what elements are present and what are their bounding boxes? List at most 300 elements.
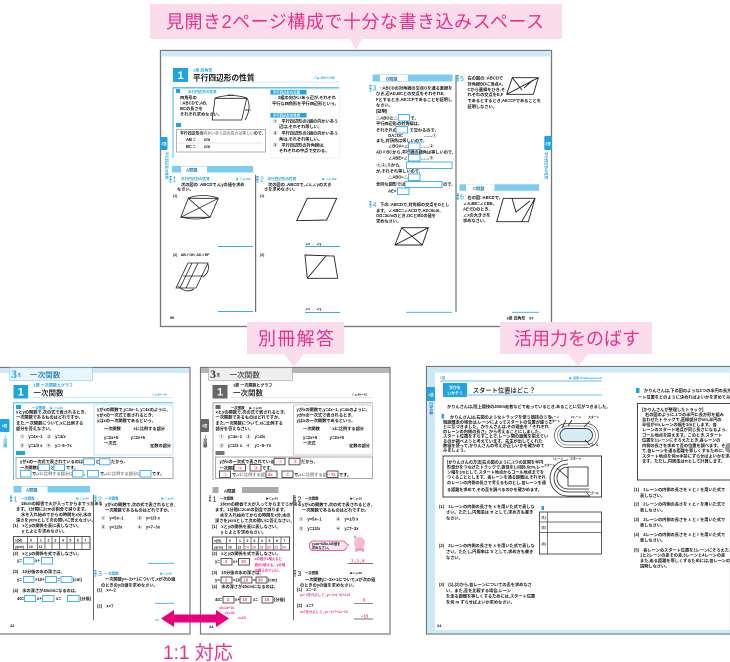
- figure: parallelogram grid: [176, 263, 208, 291]
- section band: A: [212, 487, 278, 494]
- problem 1 text: みましょう。: [443, 446, 468, 454]
- table: 12: [38, 545, 42, 549]
- exercise 1: (分後): [80, 595, 92, 602]
- inner note: yはxの一次関数であるという。: [296, 417, 355, 424]
- panel: key points: また,一次関数について,xに比例する: [216, 420, 283, 426]
- exercise 3: が,それぞれ等しいので,: [376, 168, 420, 174]
- exercise 3: 平行四辺形の対角線は,: [376, 120, 419, 127]
- exercise 4: [370, 201, 452, 312]
- panel: definitions: 角は,それぞれ等しい。: [279, 136, 322, 142]
- problem 1 text: スタート位置をずらすことで,レーン間の距離を揃えてい: [443, 432, 548, 440]
- note box: ゴール地点を揃えます。このとき,スタート: [642, 432, 722, 438]
- answer box: ①: [278, 458, 283, 465]
- panel: key points: xとyの関数で,次の式で表されるとき,: [16, 408, 86, 416]
- exercise 3 answers: 3: [298, 571, 302, 578]
- exercise 3: △ABOと△ で,: [376, 114, 416, 120]
- chapter tab: 一次関数: [30, 370, 61, 380]
- exercise 2: さを求めなさい。: [264, 186, 298, 192]
- exercise 1 answers: (2) xとyの関係を式で表しなさい。: [212, 550, 280, 557]
- exercise 2: [96, 496, 175, 563]
- activity title: [443, 383, 602, 397]
- exercise 2: ∠x ∠y: [305, 307, 322, 311]
- exercise 1: ｙとよとを求めなさい。: [21, 528, 67, 534]
- note box: 内側の長さを求めて差の位置を調べます。そし: [642, 442, 730, 449]
- exercise 4: OD=3cmのとき,OCとBDの値を: [376, 212, 436, 219]
- problem 1 text: 短距離走の場合は,レーンによってスタートの位置が違うこ: [443, 418, 552, 426]
- inner note: 一次関数 xに比例する部分: [104, 425, 166, 432]
- answer box: −7x: [328, 472, 336, 477]
- exercise 6: ∠xの大きさを: [463, 212, 490, 218]
- exercise 3: (2) x=7: [97, 604, 114, 608]
- table: 14: [245, 546, 249, 550]
- answer table: (3): [542, 542, 546, 546]
- section band: C: C問題: [473, 186, 485, 192]
- exercise 1 answers: 10: [244, 578, 249, 582]
- side tab: [0, 419, 10, 449]
- exercise 1 answers: ×10+: [233, 578, 243, 582]
- exercise 1 answers: 30: [258, 578, 263, 582]
- section band: C: [460, 184, 539, 192]
- problem 2: 説明しなさい。: [640, 562, 669, 570]
- problem 2: 表しなさい。: [640, 522, 665, 528]
- inner note: 一次式: [104, 440, 117, 446]
- pink working notes: 40=2x+10: [219, 606, 234, 610]
- exercise 3: それぞれの で交わるので,: [376, 126, 436, 134]
- panel: definitions: 辺は,それぞれ等しい。: [279, 123, 322, 130]
- exercise 3: (証明): [376, 108, 388, 114]
- panel: key points: ③ y=1/3 x ④ y=−5−7x: [220, 442, 272, 449]
- figure: parallelogram with diagonals: [395, 228, 428, 245]
- exercise 2 answers: 2: [298, 496, 302, 504]
- exercise 2: ② y=1/3 x: [138, 514, 161, 522]
- activity title: 学びを: [449, 385, 461, 390]
- exercise 3: 3: [372, 86, 376, 92]
- exercise 1 answers: 2: [227, 597, 230, 602]
- section band: A: A問題: [26, 488, 38, 494]
- exercise 4: ます。∠ABC=∠ACDで,AD=6cm,: [376, 207, 440, 214]
- activity title: いかそう: [447, 390, 463, 396]
- side tab left: [160, 137, 170, 180]
- table: 2: [48, 538, 50, 542]
- side tab right: 3章: [545, 141, 551, 146]
- page number 24: 24: [437, 623, 442, 628]
- problem 2: (1) 1レーンの内側の長さを x と r を用いた式で: [634, 486, 725, 493]
- questions left: さい。ただし,円周率は π として,求め方も書き: [446, 548, 533, 555]
- panel: key points: ▶ ⊂p.60: [249, 406, 262, 410]
- question box: だから,: [111, 458, 125, 465]
- centre divider left: [255, 175, 257, 312]
- figure: track diagram: スタート: [588, 414, 600, 419]
- section band: A: A問題: [224, 488, 236, 494]
- question box: と: [50, 465, 55, 470]
- exercise 3: △ABO≡△: [388, 174, 409, 180]
- panel: key points: ① y=4x−1 ② y=4/x: [220, 433, 266, 440]
- problem 1 text: 数値を使って,かりんさんの考えが正しいかを確かめて: [443, 442, 544, 449]
- inner note: y=2x+5 y=2x+5: [104, 435, 146, 440]
- panel: key points: 部分を答えなさい。: [216, 425, 253, 432]
- figure: parallelogram 2: [305, 255, 338, 278]
- table: 16: [252, 546, 256, 550]
- panel: definitions: 平行な四角形を平行四辺形という。: [272, 100, 339, 107]
- lesson number badge: [173, 68, 188, 82]
- problem 2: (3) 3レーンの内側の長さを x と r を用いた式で: [634, 516, 725, 523]
- exercise 5: であるとするとき,AE=CFであることを: [468, 97, 541, 104]
- chapter tab: 一次関数: [230, 370, 260, 380]
- exercise 3: ……③: [421, 154, 434, 162]
- exercise 3 answers: (2) x=7: [297, 603, 314, 608]
- page header: [440, 375, 602, 381]
- exercise 1: (2) AB∥GH, AD∥EF: [173, 253, 210, 257]
- figure: lane arcs: ゴール: [590, 490, 599, 495]
- problem 2: 1と2レーンの差その差,3レーンと4レーンの差: [640, 552, 725, 558]
- arrow: one-to-one correspondence: [161, 610, 229, 627]
- panel: key points: 部分を答えなさい。: [16, 425, 54, 432]
- inner note: 定数の部分: [150, 442, 172, 449]
- section band: A: [172, 166, 253, 174]
- icon: pink character: [354, 536, 365, 552]
- exercise 3 answers: 一次関数: [305, 570, 319, 575]
- exercise 2 answers: ③ y=12/x: [299, 525, 321, 532]
- note box with figure: のレーンの内側の長さで考えるものとし,各レーンを通: [447, 479, 547, 485]
- exercise 3: (1) x=−2: [97, 588, 117, 592]
- exercise 3: 一次関数: [105, 570, 119, 576]
- exercise 3: 3: [98, 571, 102, 578]
- exercise 1: 次の図の□ABCDで,x,yの値を求め: [181, 181, 244, 188]
- exercise 3 answers: ▶⊂p.60: [350, 571, 362, 575]
- note box with figure: [443, 456, 602, 497]
- exercise 6: ∠A,BE=∠CBE,: [463, 201, 494, 206]
- exercise 3: ので,: [443, 182, 453, 188]
- exercise 1 answers: ます。1分間に2cmの割合で減ります。: [215, 506, 288, 513]
- panel: key points: それぞれ求めなさい。: [180, 110, 222, 118]
- exercise 1: 18cmの線香で火が入ってからまでうがある: [21, 500, 103, 507]
- table: 6: [276, 539, 278, 543]
- answer box: ③: [254, 464, 259, 472]
- page header: ▶ 活用 challenge point: [569, 375, 602, 380]
- exercise 1: (1): [173, 194, 177, 198]
- exercise 1 answers: 10: [241, 559, 246, 564]
- answer box: です。: [262, 464, 274, 472]
- exercise 2: 平行四辺形の性質: [268, 176, 297, 181]
- side tab: 一次関数: [203, 435, 208, 449]
- side tab: 3章: [202, 423, 208, 428]
- exercise 1: (4) 水の深さが40cmになるのは,: [13, 587, 76, 594]
- exercise 5: Cから垂線をひき,そ: [468, 86, 505, 93]
- figure: parallelogram with diagonals: [181, 196, 218, 219]
- question box: で,xに比例する部分は: [100, 470, 142, 477]
- inner note: yはxの一次関数であるという。: [97, 417, 156, 424]
- side tab left: 3章: [161, 141, 167, 146]
- table: 3: [54, 538, 56, 542]
- exercise 1: 一次関数: [21, 496, 35, 500]
- answer box: yがxの一次式で表されているのは,: [220, 458, 284, 465]
- figure: lane arcs: 1レーン: [553, 456, 563, 460]
- exercise 1: 深さをycmとして次の問いに答えなさい。: [16, 516, 95, 524]
- panel: key points: ③ y=1/3 x ④ y=−5−7x: [20, 442, 72, 449]
- pink working notes: [219, 556, 286, 620]
- exercise 3: ひき,辺AD,BCとの交点をそれぞれE,: [376, 90, 445, 97]
- lesson number badge: [212, 385, 228, 398]
- table: 5: [268, 539, 270, 543]
- exercise 5: 証明しなさい。: [468, 103, 497, 110]
- panel: definitions: 平行四辺形の性質: [273, 112, 301, 118]
- panel: key points: BCの長さを: [180, 105, 203, 112]
- exercise 1 answers: y=: [215, 578, 220, 582]
- page header: 1章: [440, 375, 446, 380]
- figure: parallelogram with bisector: [497, 198, 535, 222]
- exercise 1 answers: 40=: [215, 597, 223, 602]
- problem 2: 表しなさい。: [640, 506, 665, 514]
- panel: definitions: ① 平行四辺形の2組の向かいあう: [273, 118, 338, 124]
- table: 0: [229, 539, 231, 543]
- table: 6: [77, 538, 79, 542]
- exercise 3: なさい。: [376, 102, 393, 108]
- exercise 2 answers: 一次関数であるものはどれですか。: [302, 506, 369, 514]
- exercise 2 answers: ④ y=7−3x: [336, 525, 359, 532]
- questions left: を何 m ずらせばよいか求めなさい。: [446, 598, 515, 606]
- table: 5: [70, 538, 72, 542]
- exercise 5: 右の図の□ABCDで: [468, 74, 503, 82]
- exercise 3 answers: (1) x=−2: [297, 587, 317, 592]
- problem 1 text: のレーンの内側の長さ」から考えることにしました。: [443, 428, 543, 435]
- question box: 平行四辺形の向かいあう辺の長さは等しいので,: [180, 130, 263, 136]
- exercise 1: x+: [35, 558, 40, 563]
- exercise 1: 水を入れ始めてからの時間をx分,水の: [21, 511, 92, 518]
- lesson heading: ⊂p.60〜61: [152, 392, 168, 396]
- answer box: ①: [223, 471, 228, 478]
- answer box: ①: [238, 464, 243, 472]
- answer table: [540, 506, 602, 554]
- exercise 1: ▶ ⊂p.102: [236, 177, 251, 181]
- exercise 1 answers: x=: [253, 597, 258, 602]
- exercise 3: ∠ABE=∠: [388, 156, 408, 160]
- exercise 1: ▶ ⊂p.60: [76, 496, 89, 500]
- exercise 3: ▶⊂p.60: [160, 572, 172, 576]
- chapter tab: 3: [11, 367, 17, 381]
- table: 0: [30, 538, 32, 542]
- panel: definitions: ③ 平行四辺形の対角線は,: [273, 142, 324, 148]
- question box: AB = cm: [186, 137, 210, 142]
- exercise 1 answers: ▶⊂p.60: [266, 496, 278, 500]
- figure: lane arcs: スタート: [570, 456, 582, 460]
- exercise 6: 右の図□ABCDで,: [468, 194, 500, 201]
- heading banner: two-page spread: 見開き2ページ構成で十分な書き込みスペース: [166, 12, 544, 32]
- note box with figure: る距離を求めて,その差を調べるのかを確かめます。: [447, 486, 542, 492]
- figure: track diagram: ゴール: [590, 442, 599, 446]
- exercise 1 answers: 18cmの線香で火が入ってからまでうがある: [220, 500, 302, 508]
- exercise 3: また,対頂角は等しいので,: [376, 137, 424, 144]
- exercise 3: Fとするとき,AE=CFであることを証明し: [376, 96, 452, 103]
- exercise 3 answers: [295, 570, 376, 619]
- lesson heading: [30, 382, 173, 398]
- note box: て,各レーンを通る距離を等しくするために,: [642, 447, 724, 454]
- pink working notes: 値が2増える。yの値: [254, 562, 286, 567]
- figure: track diagram: 2レーン: [571, 415, 581, 419]
- note box: ます。ただし,円周率はπとして計算します。: [642, 458, 725, 464]
- lesson heading: 平行四辺形の性質: [193, 72, 255, 82]
- exercise 2 answers: ①,③,④: [350, 558, 366, 564]
- exercise 2 answers: ▶⊂p.60: [350, 496, 362, 500]
- side tab: 1章: [428, 392, 434, 397]
- figure: parallelogram 1: [297, 198, 337, 221]
- questions left: を走る距離を等しくするためには,スタート位置: [446, 592, 536, 600]
- exercise 1 answers: 一次関数: [220, 496, 234, 500]
- exercise 1: 1: [172, 176, 176, 184]
- exercise 4: 求めなさい。: [376, 218, 401, 224]
- table: y(cm): [214, 546, 223, 550]
- question box: と: [96, 459, 100, 464]
- exercise 4: 下の□ABCDで,対角線の交点をOとし: [380, 201, 449, 208]
- questions left: さい。ただし,円周率は π として,求め方も書き: [446, 508, 533, 516]
- exercise 1 answers: ｙとよとを求めなさい。: [220, 528, 266, 536]
- exercise 1 answers: y=: [215, 559, 220, 564]
- note box with figure: つくることとします。各レーンを通る距離は,それぞれ: [447, 474, 546, 480]
- exercise 2: (1): [260, 194, 264, 198]
- table: 4: [261, 539, 263, 543]
- exercise 1 answers: (3) 10分後の水の深さは,: [212, 569, 261, 576]
- chapter tab: 章: [18, 372, 22, 377]
- note box: 位置を1レーンにそろえたとき,各レーンの: [642, 436, 720, 444]
- answer box: ③: [293, 458, 298, 465]
- lesson heading: 2章 四角形: [193, 66, 212, 72]
- panel: key points: 一次関数であるものはどれですか。: [216, 414, 282, 420]
- panel: key points: [213, 403, 373, 480]
- note box: 合わせたトラックで,直線部分がxm,半円の: [642, 416, 722, 423]
- exercise 5: れぞれの交点をE,F: [468, 91, 504, 98]
- note box: [かりんさんが整理したトラック]: [642, 406, 704, 413]
- exercise 1: (2) xとyの関係を式で表しなさい。: [13, 550, 81, 557]
- exercise 2 answers: 一次関数: [305, 496, 319, 500]
- panel: key points: 平行四辺形の性質: [188, 89, 217, 94]
- panel: key points: 一次関数: [32, 405, 46, 410]
- side tab: 正負の数: [429, 402, 434, 416]
- lesson number badge: 1: [217, 386, 223, 398]
- panel: definitions: ② 平行四辺形の2組の向かいあう: [273, 130, 338, 136]
- lesson heading: [193, 66, 339, 82]
- answer box: だから,: [301, 458, 315, 465]
- table: y(cm): [15, 545, 24, 549]
- question box: です。: [152, 470, 164, 477]
- lead text: かりんさんは,陸上競技の200m走者などで走っているとき,あることに気がつきました。: [447, 403, 610, 410]
- exercise 2: ④ y=7−3x: [138, 524, 161, 530]
- exercise 2: ③ y=12/x: [101, 524, 123, 530]
- question box: です。: [66, 464, 78, 471]
- table: 20: [267, 546, 271, 550]
- lesson heading: 1節 一次関数とグラフ: [34, 382, 73, 388]
- exercise 1 answers: 水を入れ始めてからの時間をx分,水の: [220, 512, 290, 518]
- table: 4: [62, 538, 64, 542]
- page number 42: 42: [10, 623, 15, 628]
- table: [14, 536, 90, 550]
- questions left: なさい。: [446, 554, 463, 560]
- panel: key points: また,一次関数について,xに比例する: [16, 420, 83, 426]
- heading banner: application: [500, 322, 652, 366]
- exercise 6: [458, 194, 539, 312]
- lesson number badge: 1: [177, 70, 184, 82]
- exercise 2 answers: [295, 496, 373, 564]
- panel: key points: [173, 88, 339, 158]
- answer box: です。: [339, 471, 351, 478]
- side tab right: 平行四辺形の性質: [544, 152, 549, 180]
- table: 12: [238, 546, 241, 550]
- pink working notes: xの値が1増えると: [254, 556, 282, 561]
- side tab: 3章: [2, 423, 8, 428]
- exercise 3 answers: 一次関数y=−2x+1について,xが次の値: [305, 576, 376, 583]
- panel: definitions: 平行四辺形の定義: [273, 90, 301, 94]
- figure: lane arcs: [544, 456, 599, 496]
- question box: ,: [84, 471, 85, 476]
- table: 22: [274, 546, 278, 550]
- callout: y=ax+bのa,bの値を: [312, 541, 340, 546]
- side tab: 一次関数: [3, 435, 8, 449]
- activity title: スタート位置はどこ？: [473, 386, 535, 394]
- exercise 1 answers: [210, 496, 302, 620]
- exercise 1: 1: [14, 496, 18, 504]
- chapter tab: 章: [216, 372, 220, 377]
- problem 1 text: とに気づきました。かりんさんは,その理由を「それぞれ: [443, 423, 550, 430]
- exercise 1 answers: x+: [235, 597, 240, 602]
- panel: two-page spread sample: [160, 50, 552, 326]
- exercise 3: AE=: [388, 188, 397, 194]
- heading banner: answer book: [247, 322, 344, 367]
- exercise 1: なさい。: [177, 186, 194, 192]
- figure: parallelogram: 5cm: [228, 93, 234, 97]
- problem 2: (2) 2レーンの内側の長さを x と r を用いた式で: [634, 500, 725, 508]
- table: x(分): [15, 538, 22, 542]
- exercise 1 answers: (cm): [268, 578, 277, 582]
- lesson heading: 一次関数: [34, 388, 64, 398]
- lesson heading: ⊂p.102〜105: [314, 76, 335, 80]
- note box with figure: [かりんさんの方法]右の図のように,1つの区間を半円: [447, 458, 543, 464]
- panel: key points: 一次関数であるものはどれですか。: [16, 414, 83, 420]
- column divider: [292, 495, 294, 620]
- exercise 2: ∠x ∠y: [305, 242, 322, 246]
- exercise 3 answers: x=7を代入して, y=−2×7+1=−13: [300, 609, 348, 614]
- note box: [638, 404, 730, 480]
- table: 2: [246, 539, 248, 543]
- answer box: [216, 457, 372, 478]
- exercise 1: y=: [17, 558, 22, 563]
- heading banner: two-page spread: [150, 4, 562, 50]
- heading banner: application: 活用力をのばす: [514, 329, 640, 349]
- chapter tab: [208, 367, 292, 381]
- exercise 3: [96, 570, 176, 620]
- lesson heading: ⊂p.60〜61: [352, 392, 368, 396]
- question box: yがxの一次式で表されているのは,: [20, 458, 84, 465]
- answer box: で,xに比例する部分は: [294, 471, 336, 478]
- exercise 3: ①,②,③から,: [376, 162, 400, 168]
- question box: [176, 130, 266, 152]
- exercise 6: 6: [460, 194, 464, 202]
- questions left: (2) 2レーンの内側の長さを x を用いた式で表しな: [439, 542, 535, 549]
- figure: parallelogram with perpendiculars: [507, 78, 538, 94]
- centre divider right: [455, 75, 457, 312]
- exercise 1: ます。1分間に2cmの割合で減ります。: [16, 506, 89, 512]
- exercise 1: 平行四辺形の性質: [181, 176, 210, 181]
- figure: parallelogram: 3cm: [245, 108, 251, 112]
- question box: 一次関数は: [20, 464, 42, 471]
- inner note: 一次式: [303, 440, 316, 446]
- panel: definitions: 2組の向かいあう辺が,それぞれ: [278, 94, 337, 101]
- callout: 求めなさい。: [312, 545, 331, 550]
- note box: 半径がrm,レーンの幅を1mとします。各: [642, 421, 718, 428]
- exercise 1: [11, 496, 103, 602]
- exercise 5: [458, 74, 541, 110]
- panel: key points: 四角形の: [180, 94, 197, 101]
- side tab right: [544, 136, 552, 180]
- exercise 2: ① y=5x−1: [101, 514, 124, 522]
- table: x(分): [214, 538, 221, 543]
